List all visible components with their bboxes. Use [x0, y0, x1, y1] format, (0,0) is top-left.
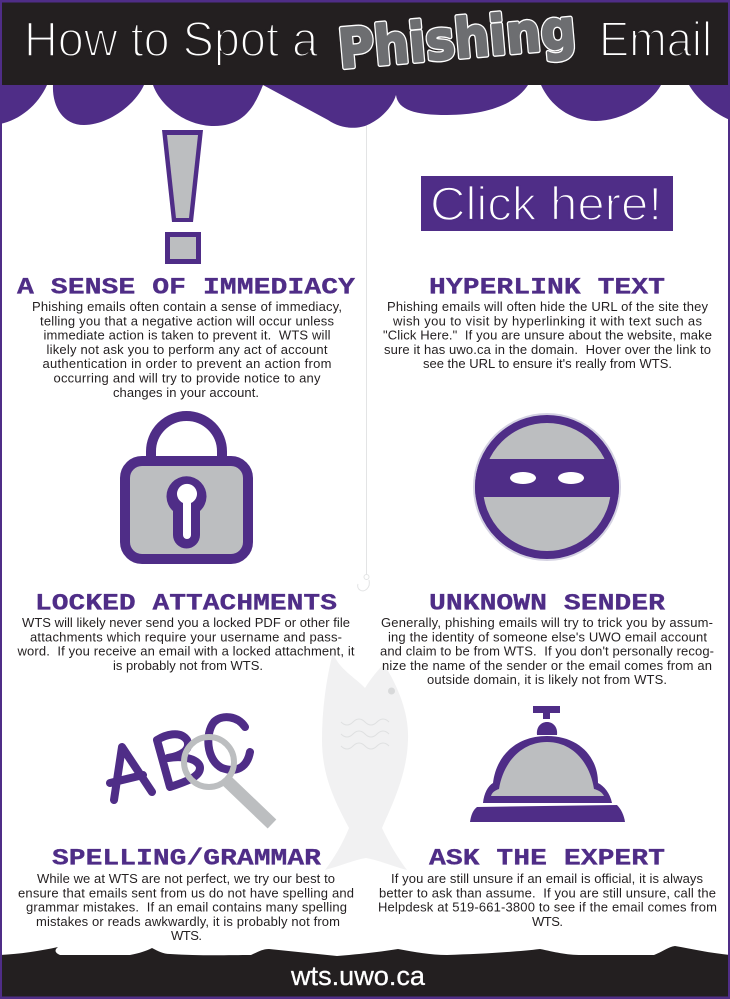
body text: unknown: [380, 615, 714, 687]
body text: spelling: grammar mistakes. If an email contains many spelling: [26, 900, 347, 915]
panel: spelling/grammar: [18, 846, 354, 943]
icon: click here button: Click here!: [430, 177, 662, 230]
panel: unknown sender: [380, 590, 714, 687]
icon: ABC with magnifying glass: [110, 717, 272, 824]
panel: spelling/grammar: SPELLING/GRAMMAR: [52, 846, 321, 872]
body text: unknown: nize the name of the sender or the email comes from an: [382, 658, 712, 673]
body text: spelling: mistakes or reads awkwardly, it is probably not from: [36, 914, 340, 929]
body text: immediacy: immediate action is taken to prevent it. WTS will: [44, 328, 331, 343]
body text: immediacy: changes in your account.: [113, 385, 259, 400]
body text: immediacy: [32, 299, 342, 400]
title text: How to Spot a: How to Spot a: [24, 13, 319, 67]
body text: spelling: While we at WTS are not perfect, we try our best to: [37, 871, 335, 886]
body text: expert: [378, 871, 717, 929]
header bar: [0, 0, 730, 85]
body text: locked: WTS will likely never send you a locked PDF or other file: [22, 615, 350, 630]
body text: spelling: WTS.: [171, 928, 202, 943]
fish illustration: [322, 652, 408, 870]
body text: immediacy: occurring and will try to provide notice to any: [54, 370, 321, 386]
body text: hyperlink: see the URL to ensure it's really from WTS.: [423, 356, 672, 371]
panel: a sense of immediacy: A SENSE OF IMMEDIACY: [17, 274, 355, 300]
icon: service bell: [470, 706, 625, 822]
body text: unknown: Generally, phishing emails will try to trick you by assum-: [381, 615, 713, 630]
body text: locked: attachments which require your username and pass-: [30, 629, 342, 644]
body text: unknown: ing the identity of someone else's UWO email account: [388, 629, 707, 644]
body text: unknown: and claim to be from WTS. If you don't personally recog-: [380, 644, 714, 659]
footer url: wts.uwo.ca: [290, 961, 426, 991]
body text: hyperlink: "Click Here." If you are unsure about the website, make: [383, 328, 712, 343]
fishing line and hook: [358, 85, 369, 591]
panel: ask the expert: ASK THE EXPERT: [429, 846, 665, 872]
body text: spelling: ensure that emails sent from us do not have spelling and: [18, 885, 354, 900]
panel: a sense of immediacy: [17, 274, 355, 400]
panel: unknown sender: UNKNOWN SENDER: [429, 590, 665, 616]
body text: expert: better to ask than assume. If you are still unsure, call the: [379, 885, 716, 900]
panel: hyperlink text: HYPERLINK TEXT: [429, 274, 665, 300]
body text: immediacy: likely not ask you to perform any act of account: [46, 342, 328, 357]
body text: hyperlink: [383, 299, 712, 371]
body text: locked: [16, 615, 355, 673]
icon: exclamation mark: [162, 130, 203, 264]
purple scalloped curtain: [0, 85, 730, 128]
body text: immediacy: authentication in order to prevent an action from: [42, 356, 332, 371]
body text: locked: is probably not from WTS.: [113, 658, 263, 673]
body text: unknown: outside domain, it is likely not from WTS.: [427, 672, 667, 687]
panel: hyperlink text: [383, 274, 712, 371]
body text: spelling: [18, 871, 354, 943]
body text: expert: If you are still unsure if an email is official, it is always: [391, 871, 704, 886]
title text: Email: Email: [599, 13, 712, 67]
panel: locked attachments: [16, 590, 355, 673]
body text: locked: word. If you receive an email with a locked attachment, it: [16, 644, 355, 659]
body text: expert: WTS.: [532, 914, 563, 929]
body text: immediacy: telling you that a negative action will occur unless: [40, 313, 334, 328]
panel: ask the expert: [378, 846, 717, 929]
footer wave band: [0, 946, 730, 999]
body text: immediacy: Phishing emails often contain a sense of immediacy,: [32, 299, 342, 314]
body text: hyperlink: Phishing emails will often hide the URL of the site they: [387, 299, 708, 314]
body text: expert: Helpdesk at 519-661-3800 to see if the email comes from: [378, 900, 717, 915]
body text: hyperlink: sure it has uwo.ca in the domain. Hover over the link to: [384, 342, 711, 357]
body text: hyperlink: wish you to visit by hyperlinking it with text such as: [392, 313, 702, 328]
icon: masked sender: [470, 413, 624, 561]
panel: locked attachments: LOCKED ATTACHMENTS: [35, 590, 337, 616]
icon: padlock: [125, 416, 248, 559]
